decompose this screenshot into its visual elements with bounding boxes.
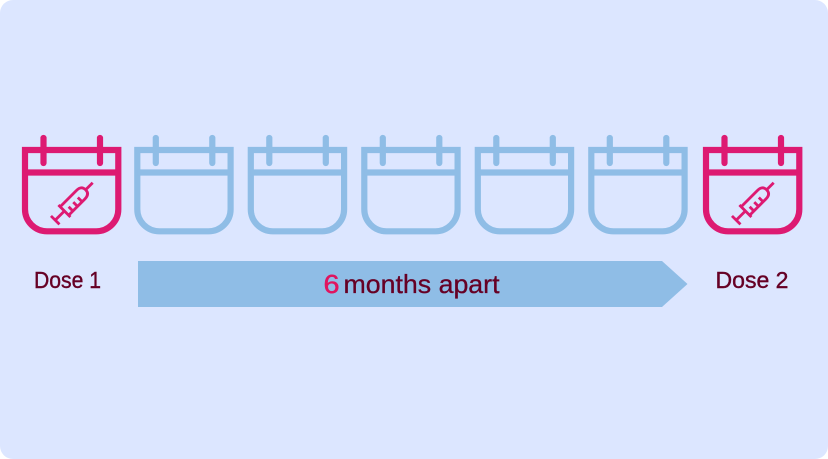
icon: empty calendar 3 bbox=[364, 138, 458, 231]
label: Dose 2: Dose 2 bbox=[716, 267, 788, 293]
icon: empty calendar 4 bbox=[478, 138, 571, 231]
label: Dose 1: Dose 1 bbox=[34, 267, 101, 293]
label: 6 months apart: 6 bbox=[324, 269, 340, 299]
icon: syringe bbox=[49, 177, 99, 226]
icon: syringe bbox=[730, 177, 780, 226]
icon: empty calendar 1 bbox=[137, 138, 231, 231]
icon: calendar dose 2 with syringe bbox=[706, 138, 799, 231]
icon: calendar dose 1 with syringe bbox=[25, 138, 118, 231]
label: 6 months apart: months apart bbox=[344, 269, 500, 299]
icon: empty calendar 5 bbox=[591, 138, 685, 231]
arrow: 6 months apart bbox=[138, 261, 688, 307]
icon: empty calendar 2 bbox=[251, 138, 344, 231]
